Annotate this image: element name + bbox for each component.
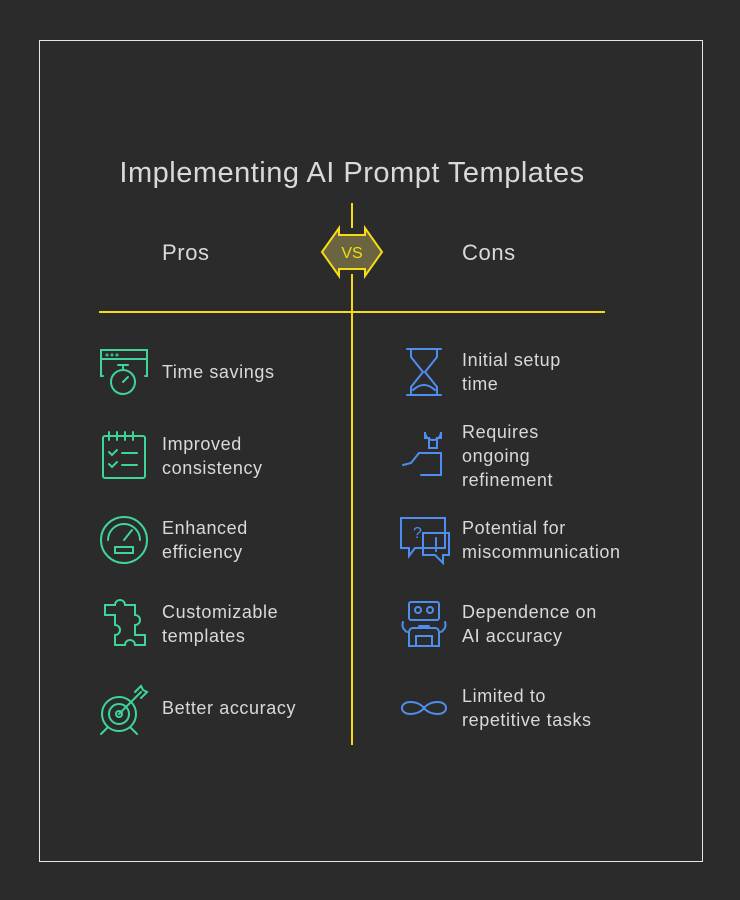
cons text: Initial setup (462, 350, 561, 370)
pros text: Time savings (162, 362, 275, 382)
title: Implementing AI Prompt Templates (119, 157, 585, 189)
icon: robot (402, 602, 446, 646)
cons text (462, 350, 561, 394)
icon: checklist (103, 432, 145, 478)
vs badge (322, 228, 382, 276)
text: templates (162, 626, 245, 646)
icon: hourglass (407, 349, 441, 395)
cons text: time (462, 374, 498, 394)
pros icons (100, 349, 149, 735)
text: Customizable (162, 602, 278, 622)
text: ongoing (462, 446, 530, 466)
icon: stopwatch (101, 350, 147, 394)
text: Enhanced (162, 518, 248, 538)
text: miscommunication (462, 542, 621, 562)
text: AI accuracy (462, 626, 563, 646)
icon: gauge (101, 517, 147, 563)
text: refinement (462, 470, 553, 490)
text: Dependence on (462, 602, 597, 622)
text: Potential for (462, 518, 566, 538)
text: Better accuracy (162, 698, 296, 718)
cons icons (400, 348, 450, 715)
icon: target (101, 686, 147, 734)
icon: infinity (402, 702, 446, 714)
icon: speech bubbles: ? (413, 525, 422, 542)
text: repetitive tasks (462, 710, 592, 730)
icon: speech bubbles (401, 518, 449, 563)
heading: pros: Pros (162, 240, 210, 265)
icon: wrench hand (403, 432, 441, 475)
text: consistency (162, 458, 263, 478)
vs badge: VS (341, 245, 363, 262)
text: Improved (162, 434, 242, 454)
text: Limited to (462, 686, 546, 706)
icon: puzzle (105, 600, 145, 645)
text: efficiency (162, 542, 243, 562)
heading: cons: Cons (462, 240, 516, 265)
text: Requires (462, 422, 539, 442)
